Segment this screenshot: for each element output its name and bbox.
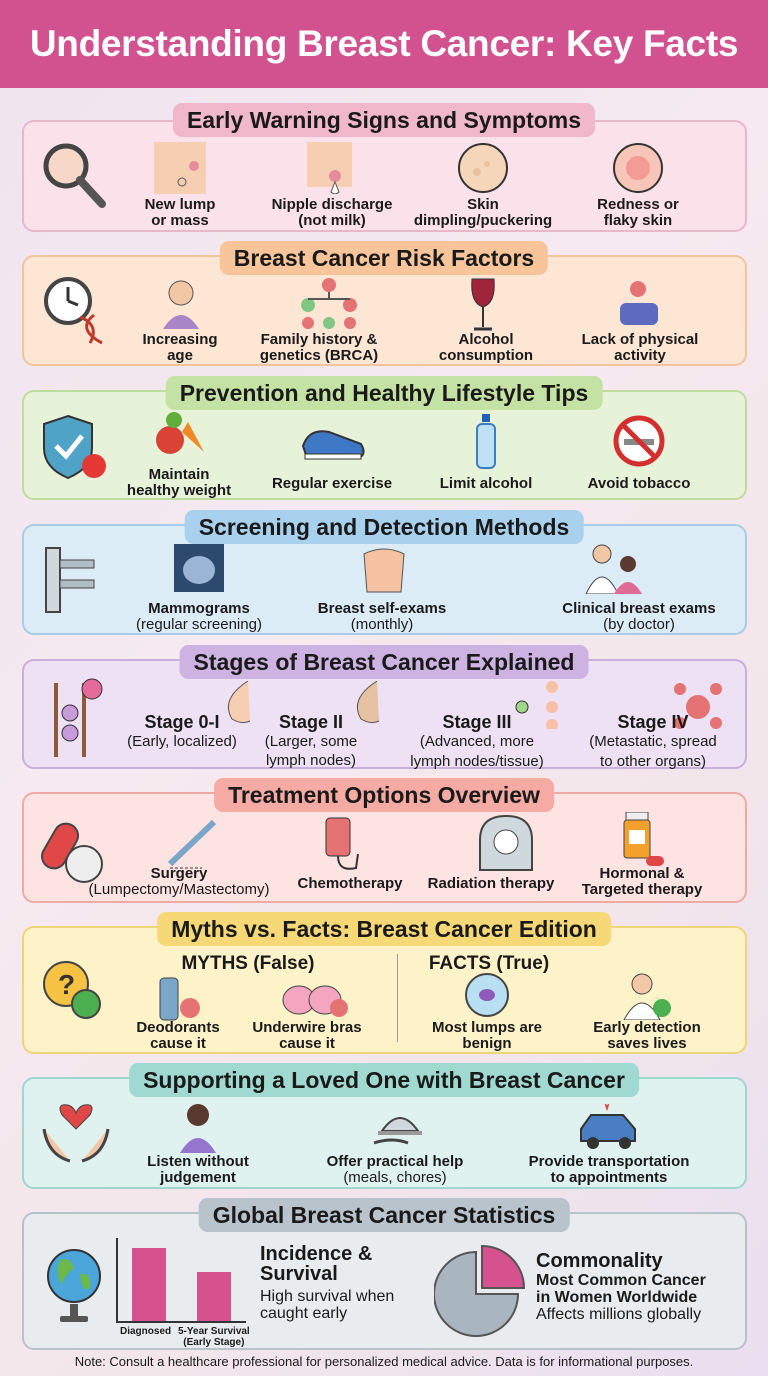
heading: myths: Myths vs. Facts: Breast Cancer Edition: [171, 916, 597, 942]
text: dimpling: Skin: [467, 196, 499, 213]
text: (Lumpectomy/Mastectomy): [89, 881, 269, 898]
panel: support: [22, 1077, 747, 1189]
text: Stage 0-I: [144, 712, 220, 732]
text: genetics (BRCA): [260, 347, 378, 364]
icon: elderly: [163, 280, 199, 329]
text: Chemotherapy: [297, 875, 403, 892]
panel: stages: [22, 659, 747, 769]
icon: shield: [43, 415, 106, 480]
heading: prevention: Prevention and Healthy Lifestyle Tips: [180, 380, 588, 406]
text: (monthly): [351, 616, 413, 633]
text: new lump: New lump: [145, 196, 215, 213]
text: Listen without: [147, 1153, 249, 1170]
text: commonality: [536, 1250, 736, 1324]
panel: myths vs facts: [22, 926, 747, 1054]
heading: statistics: Global Breast Cancer Statistics: [213, 1202, 555, 1228]
icon: bra: [279, 976, 349, 1020]
text: commonality: in Women Worldwide: [536, 1289, 697, 1306]
text: Alcohol: [458, 331, 513, 348]
text: new lump: or mass: [151, 212, 209, 229]
pie chart: [434, 1242, 526, 1338]
text: nipple discharge: [272, 196, 392, 229]
text: Breast self-exams: [318, 600, 446, 617]
text: Maintain: [149, 466, 209, 483]
text: [410, 712, 544, 770]
icon: scalpel: [162, 816, 222, 870]
text: nipple discharge: Nipple discharge: [272, 196, 392, 213]
icon: IV bag: [322, 814, 366, 874]
icon: speech bubble: [40, 958, 106, 1024]
icon: mammography machine: [45, 547, 94, 613]
text: incidence: Incidence &: [260, 1243, 372, 1265]
text: Hormonal &: [599, 865, 684, 882]
text: Most lumps are: [432, 1019, 542, 1036]
text: dimpling: dimpling/puckering: [414, 212, 552, 229]
icon: self exam: [364, 548, 404, 592]
text: Family history &: [261, 331, 377, 348]
text: Lack of physical: [582, 331, 698, 348]
text: redness: [597, 196, 679, 229]
text: Early detection: [593, 1019, 701, 1036]
text: [136, 600, 262, 633]
text: saves lives: [607, 1035, 687, 1052]
text: incidence: High survival when: [260, 1288, 394, 1305]
heading: support: Supporting a Loved One with Breast Cancer: [143, 1067, 625, 1093]
heading: stages: Stages of Breast Cancer Explained: [194, 649, 574, 675]
icon: ladder: [54, 678, 102, 757]
text: (meals, chores): [343, 1169, 447, 1186]
icon: magnifier: [44, 144, 106, 208]
panel: prevention: [22, 390, 747, 500]
text: to appointments: [551, 1169, 667, 1186]
text: [142, 331, 218, 364]
text: (Early, localized): [127, 733, 237, 750]
text: [89, 866, 269, 898]
text: commonality: Affects millions globally: [536, 1306, 701, 1323]
icon: clock dna: [44, 277, 103, 344]
text: commonality: Commonality: [536, 1250, 663, 1272]
text: [589, 712, 717, 770]
bar chart: [116, 1238, 266, 1350]
text: [432, 1020, 542, 1052]
icon: deodorant: [154, 974, 202, 1022]
text: [136, 1020, 220, 1052]
text: (Metastatic, spread: [589, 733, 717, 750]
text: [127, 466, 231, 499]
heading: risk factors: Breast Cancer Risk Factors: [234, 245, 534, 271]
panel: risk factors: [22, 255, 747, 366]
panel: treatment: [22, 792, 747, 903]
icon: shoes: [302, 430, 364, 460]
icon: listener: [176, 1101, 224, 1153]
icon: speech bubble: ?: [58, 969, 75, 1000]
text: Offer practical help: [327, 1153, 463, 1170]
text: [562, 600, 716, 633]
text: cause it: [279, 1035, 335, 1052]
header: [0, 0, 768, 88]
text: Increasing: [142, 331, 218, 348]
text: [127, 712, 237, 750]
text: [529, 1154, 689, 1186]
icon: no smoking: [614, 416, 664, 466]
bar chart: Diagnosed: [120, 1326, 171, 1337]
text: judgement: [160, 1169, 236, 1186]
text: Stage III: [442, 712, 512, 732]
text: incidence: Survival: [260, 1263, 338, 1285]
text: benign: [462, 1035, 512, 1052]
text: Stage IV: [617, 712, 689, 732]
heading: treatment: Treatment Options Overview: [228, 782, 540, 808]
icon: medicine bottle: [620, 812, 668, 870]
text: [252, 1020, 362, 1052]
heading: myths: MYTHS (False): [181, 953, 315, 974]
heading: risk factors: [220, 241, 548, 275]
icon: scanner: [476, 812, 536, 872]
text: Avoid tobacco: [588, 475, 690, 492]
text: Surgery: [151, 865, 207, 882]
text: Radiation therapy: [428, 875, 554, 892]
text: [593, 1020, 701, 1052]
text: cause it: [150, 1035, 206, 1052]
icon: heart hands: [40, 1099, 112, 1171]
text: Limit alcohol: [440, 475, 532, 492]
text: Regular exercise: [272, 475, 392, 492]
text: Targeted therapy: [582, 881, 702, 898]
text: lymph nodes/tissue): [410, 753, 544, 770]
text: redness: flaky skin: [604, 212, 672, 229]
icon: doctor check: [622, 972, 672, 1020]
text: [582, 866, 702, 898]
text: (Larger, some: [265, 733, 357, 750]
text: age: [167, 347, 193, 364]
bar chart: (Early Stage): [183, 1337, 244, 1348]
text: lymph nodes): [266, 752, 356, 769]
icon: sofa person: [620, 281, 658, 325]
text: redness: Redness or: [597, 196, 679, 213]
text: [260, 331, 378, 364]
icon: family tree: [301, 278, 357, 329]
text: Mammograms: [148, 600, 250, 617]
text: [439, 331, 533, 364]
text: [147, 1154, 249, 1186]
panel: statistics: [22, 1212, 747, 1350]
text: incidence: caught early: [260, 1305, 347, 1322]
text: Clinical breast exams: [562, 600, 716, 617]
panel: early warning signs: [22, 120, 747, 232]
icon: pills: [40, 818, 112, 890]
text: Deodorants: [136, 1019, 220, 1036]
icon: redness: [613, 143, 663, 193]
text: [327, 1154, 463, 1186]
icon: bottle: [476, 414, 496, 469]
text: [265, 712, 357, 769]
text: to other organs): [600, 753, 706, 770]
heading: facts: FACTS (True): [429, 953, 549, 974]
text: new lump: [145, 196, 215, 229]
icon: lymph: [516, 681, 558, 729]
text: Underwire bras: [252, 1019, 362, 1036]
heading: early warning: Early Warning Signs and Symptoms: [187, 107, 581, 133]
icon: cell: [464, 972, 510, 1018]
icon: mammogram: [174, 544, 224, 592]
icon: globe: [40, 1244, 106, 1326]
text: (regular screening): [136, 616, 262, 633]
text: (by doctor): [603, 616, 675, 633]
text: [582, 331, 698, 364]
icon: discharge: [307, 142, 352, 194]
text: incidence: [260, 1244, 430, 1322]
text: [318, 600, 446, 633]
icon: lump: [154, 142, 206, 194]
text: healthy weight: [127, 482, 231, 499]
icon: doctor: [586, 544, 642, 594]
panel: screening: [22, 524, 747, 635]
text: activity: [614, 347, 666, 364]
bar chart: 5-Year Survival: [178, 1326, 250, 1337]
icon: metastasis: [674, 683, 722, 729]
text: Stage II: [279, 712, 343, 732]
text: commonality: Most Common Cancer: [536, 1272, 706, 1289]
icon: cloche: [372, 1099, 428, 1151]
text: Provide transportation: [529, 1153, 689, 1170]
footnote: Note: Consult a healthcare professional for personalized medical advice. Data is for informational purposes.: [75, 1354, 693, 1369]
icon: car: [577, 1101, 641, 1151]
heading: screening: Screening and Detection Methods: [199, 514, 569, 540]
text: (Advanced, more: [420, 733, 534, 750]
header: Understanding Breast Cancer: Key Facts: [30, 23, 738, 64]
text: nipple discharge: (not milk): [298, 212, 366, 229]
icon: veggies: [156, 412, 204, 454]
icon: stage breasts: [228, 681, 250, 724]
icon: stage ii: [356, 681, 380, 724]
text: consumption: [439, 347, 533, 364]
icon: dimpling: [458, 143, 508, 193]
icon: wine: [471, 278, 495, 330]
text: dimpling: [414, 196, 552, 229]
